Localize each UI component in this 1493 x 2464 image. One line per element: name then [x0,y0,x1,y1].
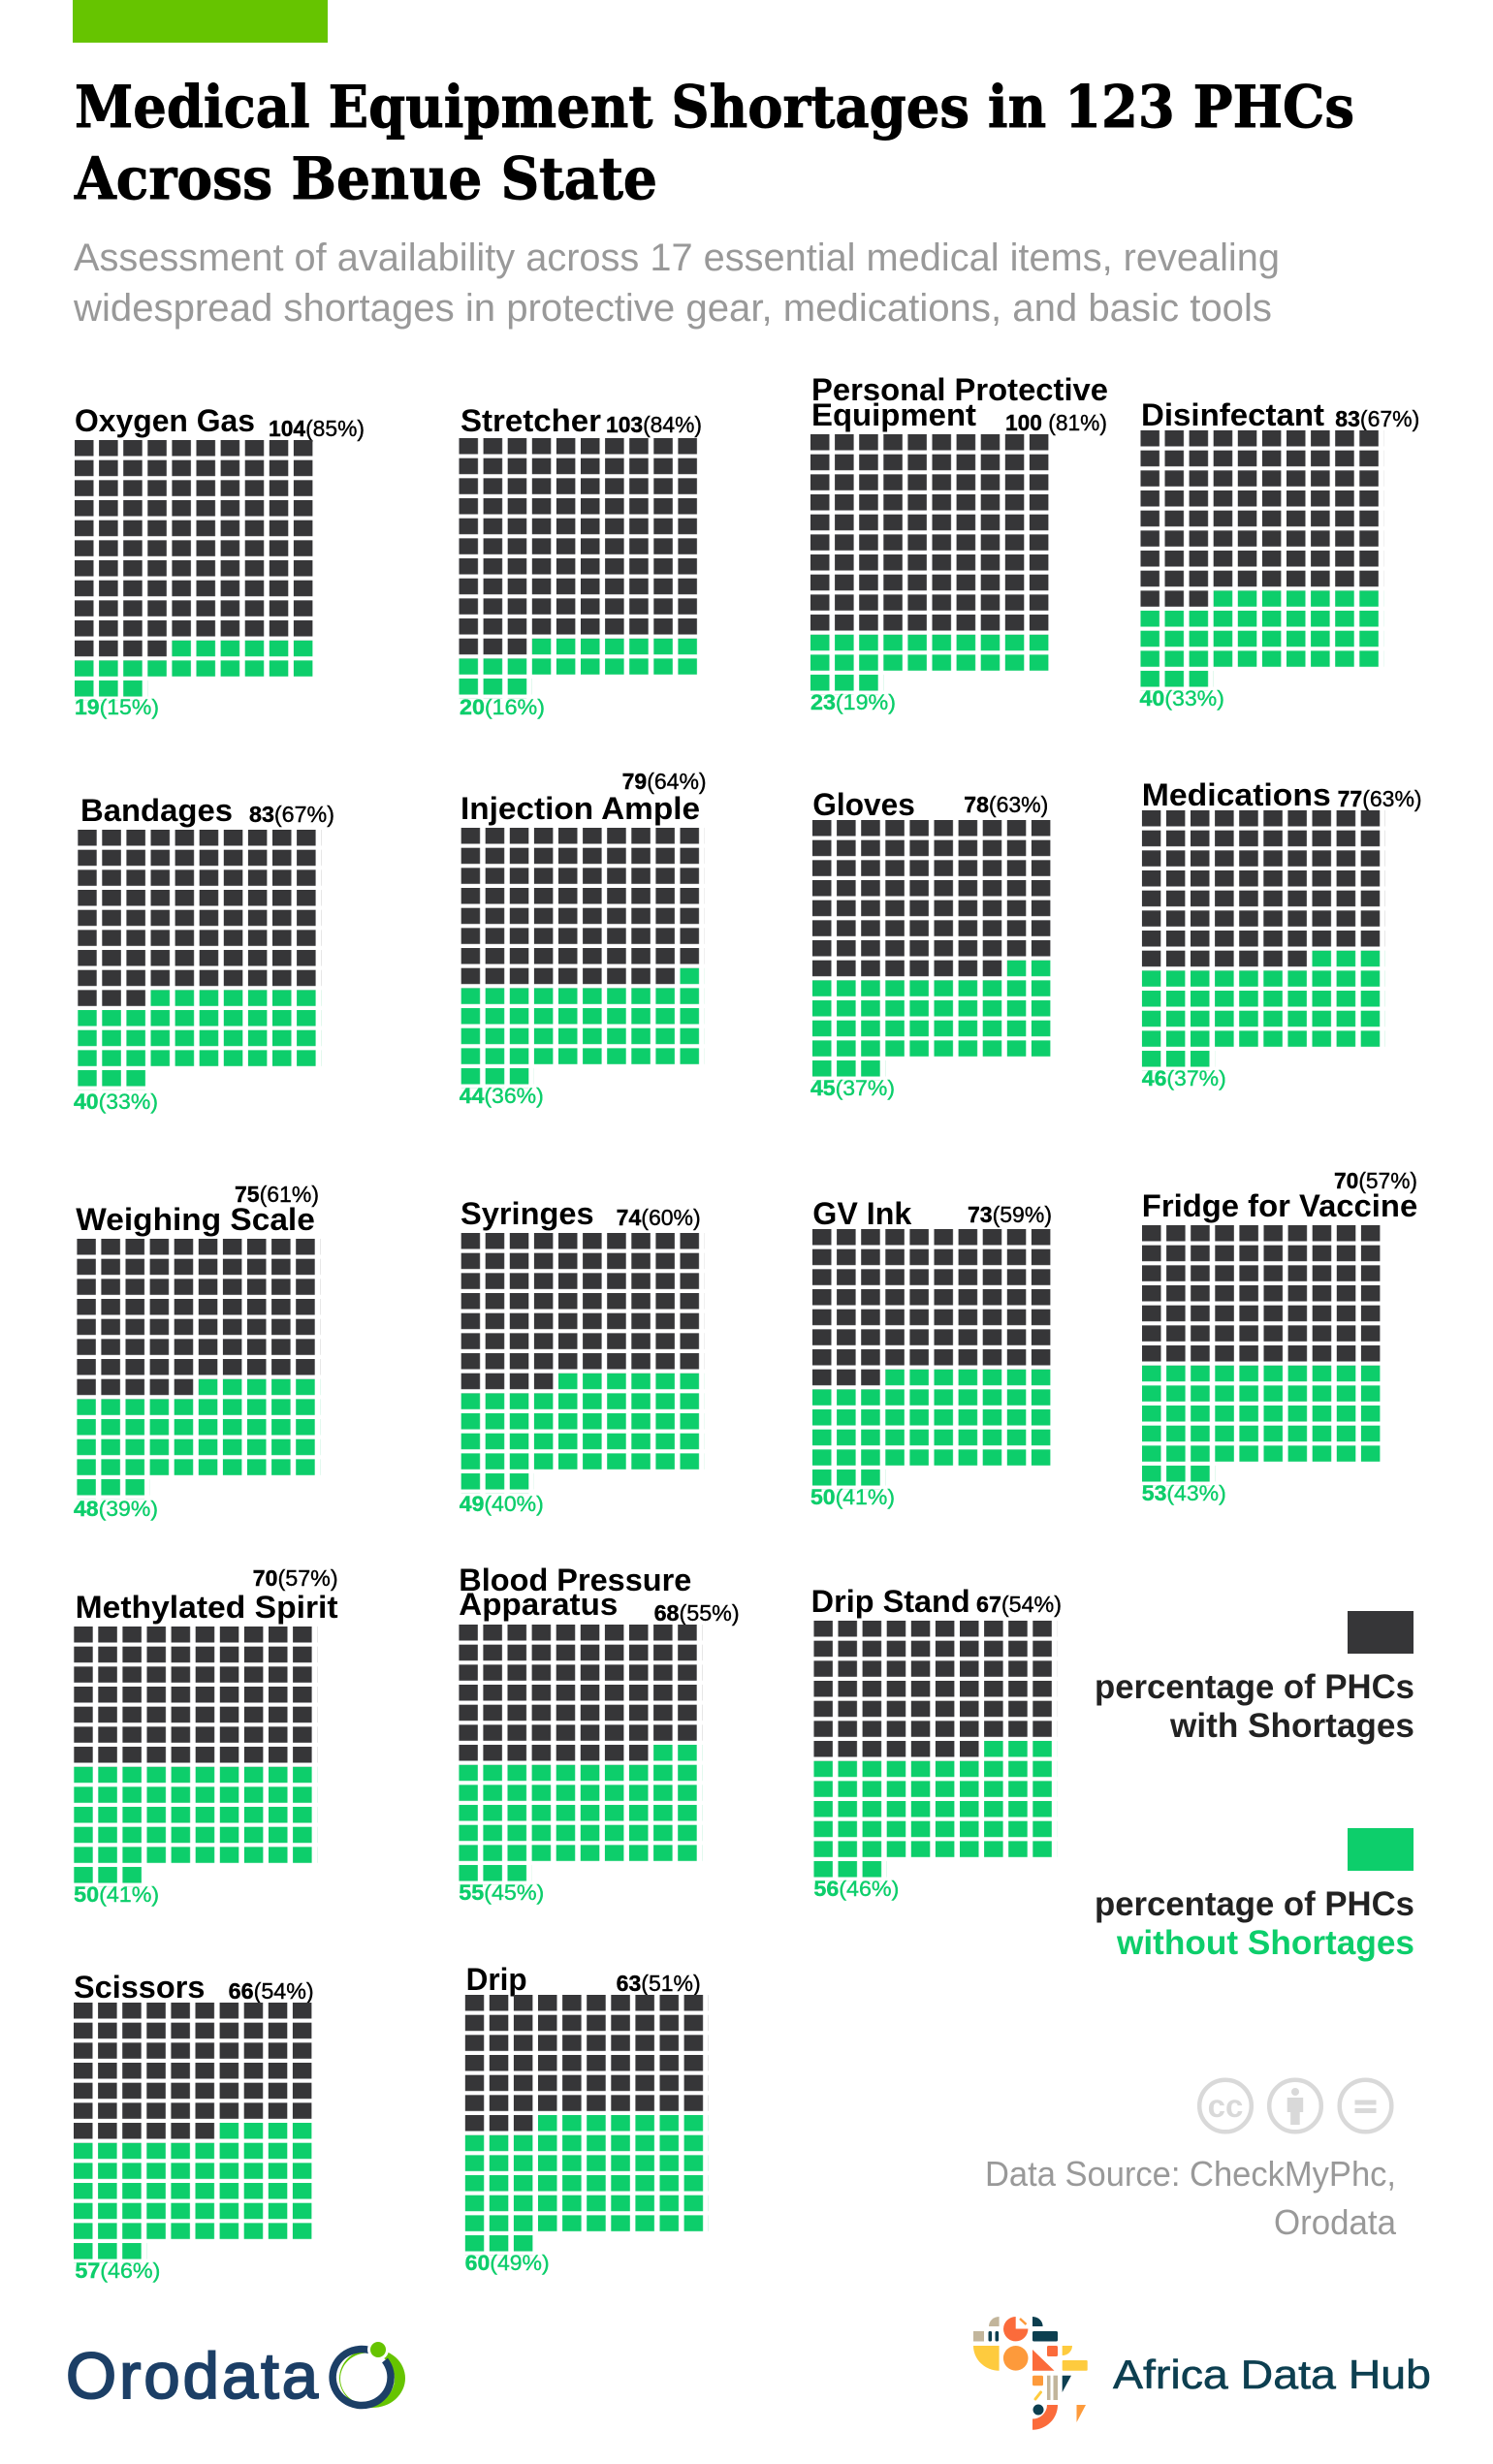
waffle chart [810,434,1054,695]
heading: Disinfectant [1141,397,1324,432]
waffle chart [78,830,321,1090]
heading: Oxygen Gas [75,403,255,438]
heading: GV Ink [812,1196,912,1231]
value: with shortages: 104(85%) [269,416,365,441]
legend: without shortages: without Shortages [1116,1924,1414,1962]
value: with shortages: 63(51%) [617,1971,701,1996]
value: without shortages: 20(16%) [460,695,545,719]
accent bar [73,0,328,43]
data source [985,2154,1397,2242]
heading [811,372,1108,432]
heading: Bandages [80,793,233,828]
value: with shortages: 66(54%) [229,1978,314,2004]
subtitle: widespread shortages in protective gear, medications, and basic tools [73,287,1272,330]
heading: Drip Stand [811,1584,970,1619]
panel: Stretcher [460,403,702,719]
data source: Orodata [1274,2202,1397,2242]
value: with shortages: 78(63%) [964,792,1048,817]
value: with shortages: 75(61%) [235,1182,319,1207]
value: with shortages: 70(57%) [253,1565,338,1591]
waffle chart [465,1995,709,2256]
legend: with shortages [1095,1611,1414,1745]
title: Across Benue State [74,145,657,213]
heading: Gloves [812,787,915,822]
logo: Africa Data Hub [973,2317,1431,2430]
heading: Equipment [811,397,976,432]
panel: Personal Protective Equipment [810,372,1108,714]
value: without shortages: 50(41%) [74,1882,159,1907]
waffle chart [460,438,702,699]
value: without shortages: 48(39%) [74,1497,158,1521]
waffle chart [461,1233,705,1494]
value: without shortages: 50(41%) [810,1485,895,1509]
subtitle [73,237,1280,330]
value: with shortages: 79(64%) [622,769,707,794]
panel: Medications [1142,777,1422,1090]
panel: GV Ink [810,1196,1056,1509]
heading: Drip [466,1962,527,1997]
heading: Methylated Spirit [76,1590,338,1625]
value: without shortages: 19(15%) [75,695,159,719]
panel: Gloves [810,787,1056,1100]
legend: with shortages: percentage of PHCs [1095,1668,1414,1706]
icon: Africa mosaic mark [973,2317,1088,2430]
heading: Apparatus [459,1587,618,1622]
heading: Injection Ample [461,791,700,826]
heading: Syringes [461,1196,594,1231]
panel: Weighing Scale [74,1182,320,1521]
value: without shortages: 60(49%) [465,2251,550,2275]
waffle chart [77,1239,320,1500]
value: with shortages: 103(84%) [606,412,702,437]
panel: Oxygen Gas [75,403,365,719]
heading: Medications [1142,777,1331,812]
icon: creative commons badges: cc [1208,2088,1243,2124]
panel: Drip Stand [811,1584,1062,1901]
value: with shortages: 83(67%) [249,802,334,827]
panel: Fridge for Vaccine [1142,1168,1417,1505]
waffle chart [1142,810,1385,1071]
title: Medical Equipment Shortages in 123 PHCs [75,74,1354,142]
value: with shortages: 100 (81%) [1005,410,1107,435]
icon: creative commons badges [1199,2080,1391,2132]
panel: Blood Pressure Apparatus [459,1563,740,1905]
value: with shortages: 73(59%) [968,1202,1052,1227]
panel: Syringes [460,1196,705,1516]
heading: Blood Pressure [459,1563,691,1597]
logo: Orodata: Orodata [66,2340,319,2413]
waffle chart [1142,1225,1385,1486]
panel: Drip [465,1962,709,2275]
waffle chart [74,1627,317,1887]
value: with shortages: 74(60%) [617,1205,701,1230]
value: with shortages: 77(63%) [1338,786,1422,811]
value: without shortages: 56(46%) [813,1877,899,1901]
waffle chart [459,1625,702,1885]
value: without shortages: 49(40%) [460,1492,544,1516]
panel: Methylated Spirit [74,1565,338,1907]
legend: without shortages [1095,1828,1414,1962]
value: with shortages: 83(67%) [1335,406,1419,431]
waffle chart [1140,430,1383,691]
heading: Personal Protective [811,372,1108,407]
waffle chart [812,820,1056,1081]
value: without shortages: 46(37%) [1142,1066,1226,1090]
value: without shortages: 55(45%) [459,1880,544,1905]
legend: with shortages: with Shortages [1169,1707,1414,1745]
panel: Scissors [74,1970,317,2283]
value: without shortages: 57(46%) [75,2259,160,2283]
value: without shortages: 40(33%) [1140,686,1224,711]
waffle chart [75,440,318,701]
waffle chart [812,1229,1056,1490]
heading: Scissors [74,1970,205,2005]
value: with shortages: 67(54%) [976,1592,1062,1617]
waffle chart [461,828,705,1089]
panel: Disinfectant [1140,397,1419,711]
subtitle: Assessment of availability across 17 essential medical items, revealing [74,237,1280,279]
heading [459,1563,691,1622]
legend: without shortages: percentage of PHCs [1095,1885,1414,1923]
heading: Stretcher [461,403,601,438]
heading: Fridge for Vaccine [1142,1188,1417,1223]
panel: Bandages [74,793,334,1114]
waffle chart [813,1621,1057,1881]
value: without shortages: 44(36%) [460,1084,544,1108]
wordmark: Africa Data Hub [1113,2352,1431,2397]
value: without shortages: 40(33%) [74,1090,158,1114]
value: without shortages: 53(43%) [1142,1481,1226,1505]
title [74,74,1354,213]
value: with shortages: 70(57%) [1334,1168,1417,1193]
panel: Injection Ample [460,769,707,1108]
value: with shortages: 68(55%) [654,1600,740,1626]
value: without shortages: 23(19%) [810,690,896,714]
data source: Data Source: CheckMyPhc, [985,2154,1396,2194]
value: without shortages: 45(37%) [810,1076,895,1100]
waffle chart [74,2003,317,2263]
heading: Weighing Scale [76,1202,315,1237]
